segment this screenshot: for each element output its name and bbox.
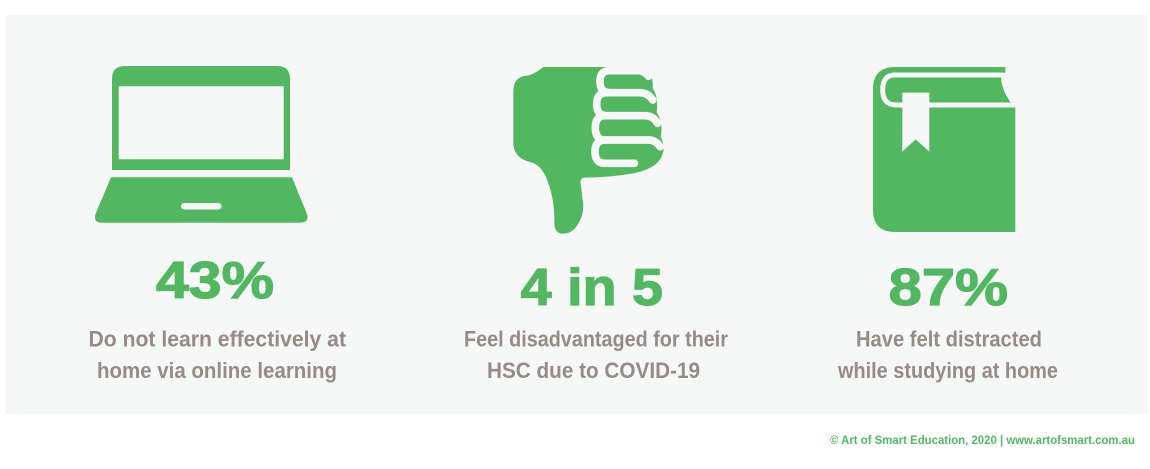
stat: 87%: 87% [889,259,1008,317]
stat: 4 in 5: 4 in 5 [521,259,663,317]
icon: laptop [95,66,308,223]
stat: 43%: 43% [156,252,274,310]
text: book caption line 1: Have felt distracted [856,326,1042,352]
text: thumbs caption line 1: Feel disadvantaged for their [464,326,728,352]
text: thumbs caption line 2: HSC due to COVID-19 [487,358,700,383]
text: laptop caption line 1: Do not learn effectively at [88,326,346,352]
footer credit: © Art of Smart Education, 2020 | www.artofsmart.com.au [830,435,1135,447]
text: laptop caption line 2: home via online learning [97,358,337,383]
icon: thumbs down [513,67,663,234]
icon: book [873,67,1016,232]
text: book caption line 2: while studying at home [837,358,1058,383]
